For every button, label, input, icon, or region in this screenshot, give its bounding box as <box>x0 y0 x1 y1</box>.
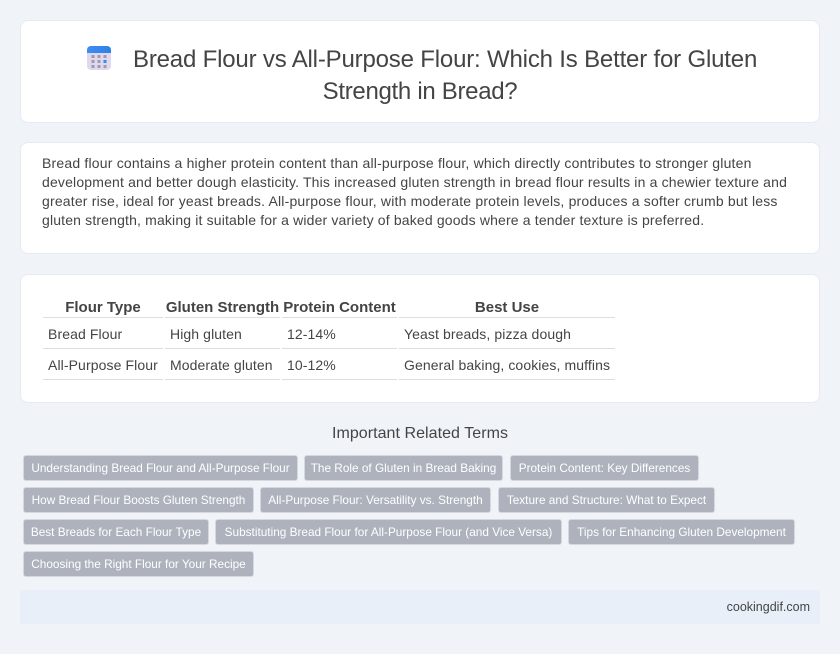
table row: bread flour: 12-14% <box>287 326 336 342</box>
table row: bread flour: Yeast breads, pizza dough <box>404 326 571 342</box>
table row: bread flour <box>48 326 571 342</box>
panel: related term tags: How Bread Flour Boosts Gluten Strength <box>32 493 245 507</box>
panel: related term tags: Choosing the Right Flour for Your Recipe <box>31 557 246 571</box>
table row: all-purpose flour: General baking, cookies, muffins <box>404 357 610 373</box>
text: site name: cookingdif.com <box>727 600 810 614</box>
panel: related term tags: Best Breads for Each Flour Type <box>31 525 201 539</box>
title: Strength in Bread? <box>323 78 517 105</box>
table row: all-purpose flour: All-Purpose Flour <box>48 357 158 373</box>
panel: related term tags: Understanding Bread Flour and All-Purpose Flour <box>31 461 290 475</box>
panel: related term tags: Tips for Enhancing Gluten Development <box>577 525 786 539</box>
text block: summary: greater rise, ideal for yeast breads. All-purpose flour, with moderate protein levels, produces a softer crumb but less <box>42 193 778 209</box>
table header row <box>65 299 539 316</box>
title <box>133 46 757 105</box>
text block: summary: gluten strength, making it suitable for a wider variety of baked goods where a tender texture is preferred. <box>42 212 704 228</box>
panel: related term tags: Protein Content: Key Differences <box>519 461 690 475</box>
table header row: Flour Type <box>65 299 141 316</box>
table row: bread flour: Bread Flour <box>48 326 122 342</box>
table row: all-purpose flour: 10-12% <box>287 357 336 373</box>
table row: all-purpose flour <box>48 357 610 373</box>
table row: bread flour: High gluten <box>170 326 242 342</box>
panel: footer <box>20 590 820 624</box>
table header row: Protein Content <box>283 299 396 316</box>
table header row: Gluten Strength <box>166 299 279 316</box>
text block: summary: Bread flour contains a higher protein content than all-purpose flour, which directly contributes to stronger gluten <box>42 155 752 171</box>
table row: all-purpose flour: Moderate gluten <box>170 357 273 373</box>
panel: summary paragraph <box>20 142 820 254</box>
text block: summary: development and better dough elasticity. This increased gluten strength in bread flour results in a chewier texture and <box>42 174 787 190</box>
panel: related term tags: Substituting Bread Flour for All-Purpose Flour (and Vice Versa) <box>225 525 552 539</box>
heading: related terms: Important Related Terms <box>332 425 508 442</box>
table header row: Best Use <box>475 299 539 316</box>
panel: related term tags <box>23 455 795 577</box>
text block: summary <box>42 155 787 228</box>
panel: related term tags: All-Purpose Flour: Versatility vs. Strength <box>268 493 483 507</box>
panel: comparison table <box>20 274 820 403</box>
panel: header <box>20 20 820 123</box>
title: Bread Flour vs All-Purpose Flour: Which Is Better for Gluten <box>133 46 757 73</box>
panel: related term tags: Texture and Structure: What to Expect <box>507 493 706 507</box>
icon: calendar <box>87 46 111 70</box>
panel: related term tags: The Role of Gluten in Bread Baking <box>311 461 496 475</box>
